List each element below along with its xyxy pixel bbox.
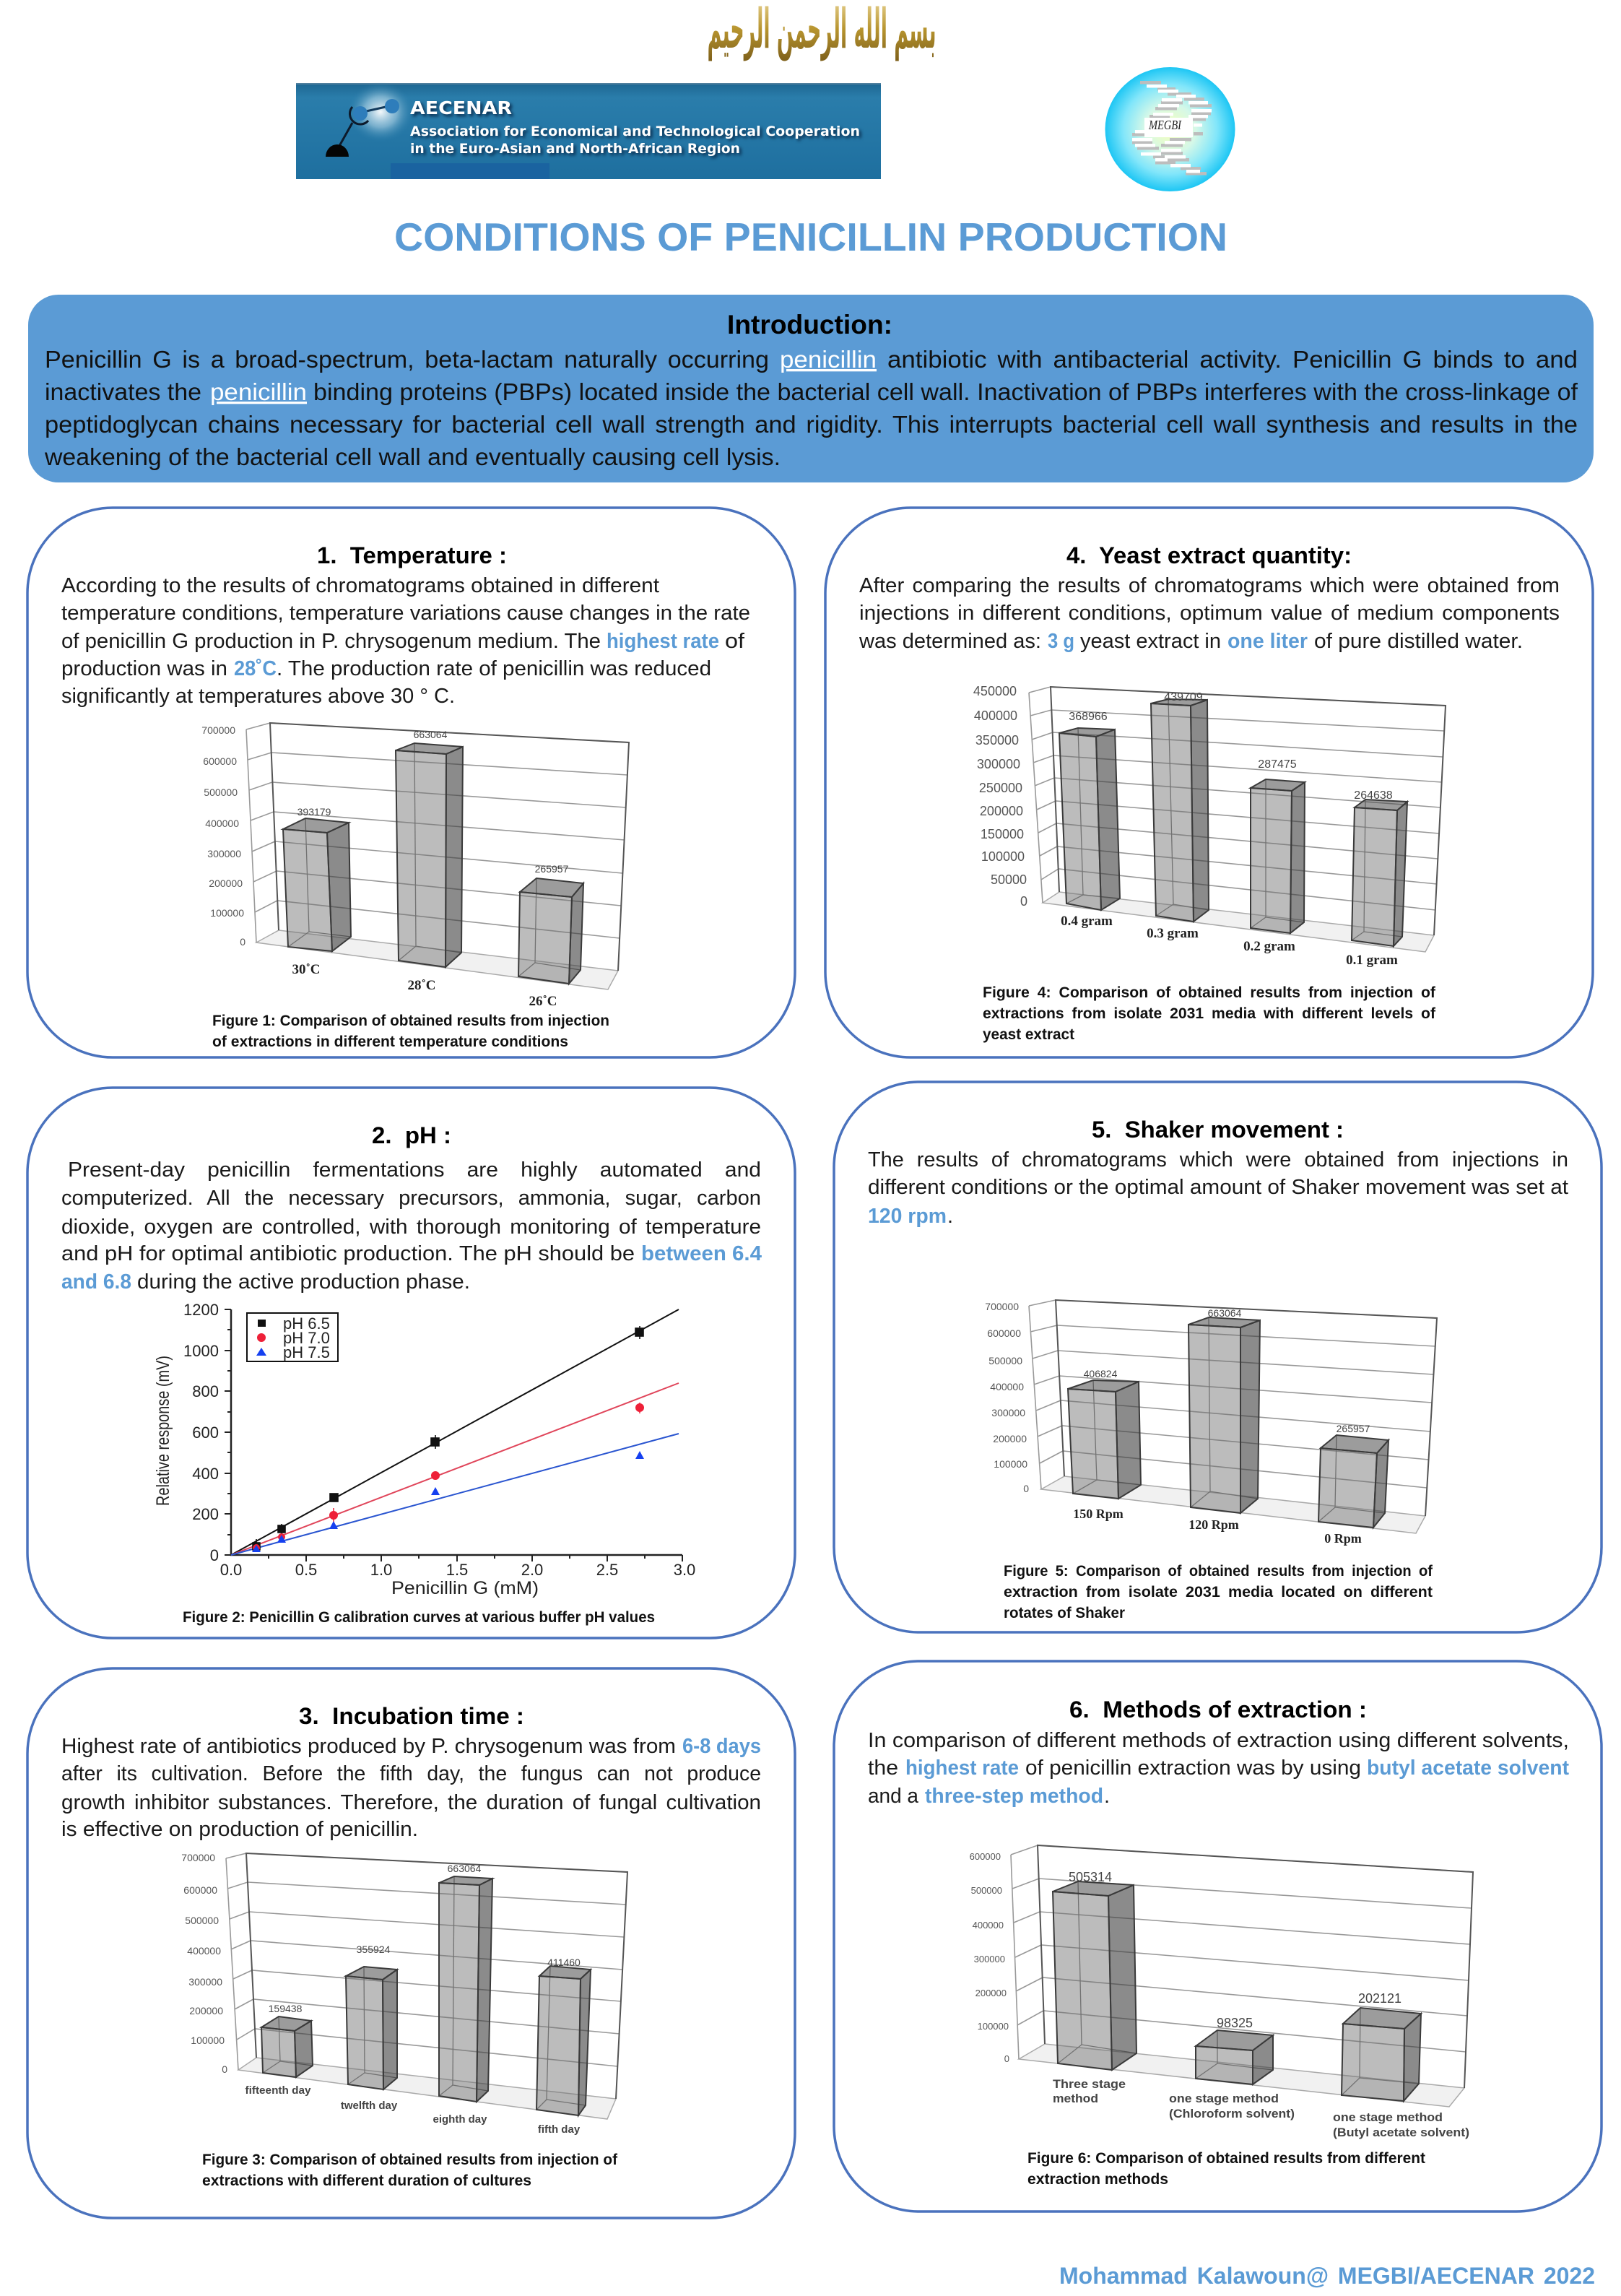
chart: figure 1 bar chart: [201, 723, 629, 1009]
chart: figure 1 bar chart: 700000: [201, 724, 235, 736]
chart: figure 4 bar chart: 250000: [979, 781, 1022, 795]
text block: pH body: [61, 1158, 762, 1294]
chart: figure 3 bar chart: 200000: [189, 2005, 223, 2016]
chart: figure 4 bar chart: 264638: [1354, 789, 1393, 802]
text block: incubation body: 6-8 days: [682, 1735, 761, 1758]
chart: figure 4 bar chart: 400000: [974, 709, 1017, 723]
text block: introduction body: binding proteins (PBPs) located inside the bacterial cell wall. Inactivation of PBPs interferes with the cross-linkage of: [313, 378, 1578, 405]
chart: figure 1 bar chart: 663064: [414, 729, 448, 740]
chart: figure 2 calibration curves: 0.0: [220, 1561, 242, 1579]
chart: figure 5 bar chart: [985, 1300, 1437, 1546]
text block: pH body: computerized. All the necessary precursors, ammonia, sugar, carbon: [61, 1187, 761, 1210]
chart: figure 1 bar chart: 265957: [535, 863, 569, 875]
chart: figure 3 bar chart: 100000: [191, 2035, 225, 2046]
caption: figure 5: [1004, 1563, 1433, 1621]
chart: figure 6 bar chart: [970, 1845, 1473, 2139]
heading: methods of extraction: 6. Methods of extraction :: [1069, 1697, 1367, 1723]
chart: figure 6 bar chart: 200000: [975, 1988, 1007, 1998]
chart: figure 3 bar chart: 411460: [547, 1957, 581, 1968]
text block: yeast body: of pure distilled water.: [1314, 630, 1523, 653]
chart: figure 4 bar chart: 0: [1020, 894, 1027, 909]
logo: AECENAR banner: AECENAR: [410, 98, 512, 118]
text block: shaker body: different conditions or the optimal amount of Shaker movement was set at: [868, 1176, 1568, 1199]
chart: figure 3 bar chart: 300000: [188, 1976, 222, 1988]
chart: figure 4 bar chart: 439709: [1164, 691, 1203, 703]
text block: incubation body: growth inhibitor substances. Therefore, the duration of fungal cultivation: [61, 1791, 761, 1814]
logo: MEGBI: [1105, 67, 1235, 191]
chart: figure 6 bar chart: Three stage: [1053, 2077, 1126, 2091]
legend: [247, 1313, 338, 1361]
chart: figure 1 bar chart: 300000: [207, 848, 241, 859]
chart: figure 6 bar chart: 100000: [978, 2021, 1009, 2032]
text block: yeast body: After comparing the results of chromatograms which were obtained from: [859, 574, 1560, 597]
text block: yeast body: yeast extract in: [1080, 630, 1221, 653]
text block: pH body: and pH for optimal antibiotic production. The pH should be: [61, 1242, 635, 1265]
chart: figure 1 bar chart: 500000: [204, 787, 238, 798]
title: CONDITIONS OF PENICILLIN PRODUCTION: [394, 215, 1227, 259]
caption: figure 1: Figure 1: Comparison of obtained results from injection: [212, 1013, 609, 1029]
heading: incubation time: 3. Incubation time :: [299, 1703, 524, 1729]
chart: figure 4 bar chart: 50000: [991, 872, 1027, 887]
chart: figure 6 bar chart: (Butyl acetate solvent): [1333, 2126, 1469, 2139]
text block: methods body: highest rate: [905, 1756, 1019, 1780]
caption: figure 4: Figure 4: Comparison of obtained results from injection of: [983, 984, 1436, 1001]
chart: figure 1 bar chart: 400000: [205, 818, 239, 829]
text block: yeast body: 3 g: [1048, 630, 1074, 653]
chart: figure 4 bar chart: 287475: [1258, 758, 1297, 771]
text block: methods body: the: [868, 1756, 898, 1780]
logo: AECENAR banner: [296, 82, 881, 179]
text block: introduction body: penicillin: [210, 378, 307, 405]
chart: figure 3 bar chart: 700000: [181, 1852, 215, 1863]
chart: figure 5 bar chart: 700000: [985, 1301, 1019, 1312]
text block: temperature body: highest rate: [607, 630, 719, 653]
chart: figure 1 bar chart: 600000: [203, 755, 237, 767]
caption: figure 1: of extractions in different temperature conditions: [212, 1034, 568, 1050]
chart: figure 3 bar chart: [181, 1852, 627, 2136]
text block: temperature body: of penicillin G production in P. chrysogenum medium. The: [61, 630, 601, 653]
chart: figure 2 calibration curves: 1000: [183, 1342, 219, 1360]
caption: figure 5: extraction from isolate 2031 media located on different: [1004, 1584, 1433, 1600]
text block: temperature body: of: [725, 630, 745, 653]
chart: figure 6 bar chart: one stage method: [1169, 2092, 1279, 2105]
chart: figure 4 bar chart: 300000: [977, 757, 1020, 771]
caption: figure 3: extractions with different duration of cultures: [202, 2172, 531, 2189]
chart: figure 6 bar chart: 600000: [970, 1851, 1001, 1862]
chart: figure 3 bar chart: 500000: [185, 1915, 219, 1926]
chart: figure 6 bar chart: 500000: [971, 1885, 1002, 1896]
text block: incubation body: [61, 1735, 761, 1841]
text block: introduction body: antibiotic with antibacterial activity. Penicillin G binds to and: [887, 346, 1578, 373]
chart: figure 2 calibration curves: 2.5: [596, 1561, 618, 1579]
chart: figure 5 bar chart: 100000: [994, 1458, 1027, 1470]
chart: figure 5 bar chart: 663064: [1208, 1307, 1242, 1319]
chart: figure 6 bar chart: 98325: [1217, 2016, 1253, 2030]
chart: figure 5 bar chart: 500000: [988, 1355, 1022, 1366]
chart: figure 2 calibration curves: 800: [192, 1382, 219, 1400]
chart: figure 5 bar chart: 265957: [1337, 1423, 1370, 1434]
text block: pH body: and 6.8: [61, 1270, 131, 1294]
text block: methods body: [868, 1729, 1569, 1808]
chart: figure 4 bar chart: 450000: [973, 684, 1017, 698]
chart: figure 1 bar chart: 393179: [297, 806, 331, 818]
caption: figure 6: Figure 6: Comparison of obtained results from different: [1027, 2150, 1425, 2167]
chart: figure 1 bar chart: 28˚C: [407, 978, 436, 993]
panel: 5 shaker movement: [834, 1082, 1602, 1632]
legend: pH 6.5: [283, 1314, 330, 1333]
caption: figure 5: rotates of Shaker: [1004, 1605, 1125, 1621]
heading: shaker movement: 5. Shaker movement :: [1092, 1117, 1344, 1143]
chart: figure 4 bar chart: 0.2 gram: [1243, 939, 1295, 954]
chart: figure 3 bar chart: 663064: [448, 1863, 482, 1874]
legend: pH 7.0: [283, 1329, 330, 1347]
chart: figure 4 bar chart: [973, 684, 1446, 968]
text block: methods body: of penicillin extraction was by using: [1025, 1756, 1361, 1780]
chart: figure 6 bar chart: (Chloroform solvent): [1169, 2107, 1295, 2120]
chart: figure 2 calibration curves: 2.0: [521, 1561, 543, 1579]
logo: AECENAR banner: in the Euro-Asian and North-African Region: [410, 141, 740, 157]
chart: figure 2 calibration curves: 0.5: [295, 1561, 317, 1579]
caption: figure 6: [1027, 2150, 1425, 2188]
chart: figure 6 bar chart: 400000: [973, 1920, 1004, 1931]
text block: incubation body: Highest rate of antibiotics produced by P. chrysogenum was from: [61, 1735, 676, 1758]
text block: introduction body: [44, 346, 1578, 470]
chart: figure 5 bar chart: 200000: [993, 1433, 1027, 1444]
chart: figure 5 bar chart: 600000: [987, 1327, 1021, 1339]
chart: figure 1 bar chart: 200000: [209, 878, 243, 889]
text block: shaker body: [868, 1148, 1568, 1228]
chart: figure 3 bar chart: 159438: [269, 2003, 303, 2014]
chart: figure 2 calibration curves: 200: [192, 1505, 219, 1523]
text block: introduction body: Penicillin G is a broad-spectrum, beta-lactam naturally occurring: [45, 346, 769, 373]
chart: figure 5 bar chart: 406824: [1084, 1368, 1118, 1379]
text block: incubation body: after its cultivation. Before the fifth day, the fungus can not produce: [61, 1762, 761, 1785]
chart: figure 2 calibration curves: 0: [210, 1546, 219, 1564]
text block: methods body: three-step method: [925, 1785, 1103, 1808]
chart: figure 5 bar chart: 150 Rpm: [1073, 1507, 1124, 1521]
chart: figure 2 calibration curves: Penicillin G (mM): [391, 1578, 539, 1598]
text block: introduction body: peptidoglycan chains necessary for bacterial cell wall strength and rigidity. This interrupts bacterial cell wall synthesis and results in the: [45, 411, 1578, 438]
chart: figure 4 bar chart: 150000: [981, 827, 1024, 841]
chart: figure 6 bar chart: 300000: [974, 1954, 1005, 1964]
text block: temperature body: temperature conditions, temperature variations cause changes in the rate: [61, 602, 750, 625]
chart: figure 4 bar chart: 0.4 gram: [1061, 914, 1113, 929]
text block: pH body: dioxide, oxygen are controlled, with thorough monitoring of temperature: [61, 1216, 761, 1239]
text block: temperature body: . The production rate of penicillin was reduced: [277, 657, 711, 680]
caption: figure 5: Figure 5: Comparison of obtained results from injection of: [1004, 1563, 1433, 1580]
caption: figure 2: Figure 2: Penicillin G calibration curves at various buffer pH values: [183, 1609, 655, 1626]
text block: shaker body: .: [947, 1205, 953, 1228]
chart: figure 1 bar chart: 26˚C: [529, 994, 557, 1009]
text block: introduction body: inactivates the: [45, 378, 201, 405]
legend: pH 7.5: [283, 1343, 330, 1361]
chart: figure 6 bar chart: 505314: [1069, 1870, 1112, 1884]
text block: methods body: and a: [868, 1785, 919, 1808]
chart: figure 3 bar chart: 600000: [183, 1884, 217, 1896]
chart: figure 1 bar chart: 0: [240, 936, 245, 948]
panel: 1 temperature: [27, 508, 795, 1057]
chart: figure 5 bar chart: 120 Rpm: [1188, 1517, 1239, 1532]
heading: pH: 2. pH :: [372, 1122, 451, 1148]
text block: yeast body: one liter: [1227, 630, 1308, 653]
text block: yeast body: was determined as:: [859, 630, 1041, 653]
chart: figure 3 bar chart: 400000: [187, 1945, 221, 1957]
panel: 2 pH: [27, 1088, 795, 1638]
chart: figure 5 bar chart: 300000: [991, 1407, 1025, 1418]
chart: figure 2 calibration curves: 1200: [183, 1301, 219, 1319]
chart: figure 3 bar chart: eighth day: [433, 2113, 487, 2126]
chart: figure 3 bar chart: fifth day: [538, 2123, 581, 2136]
chart: figure 5 bar chart: 400000: [990, 1381, 1024, 1392]
text block: incubation body: is effective on production of penicillin.: [61, 1818, 418, 1841]
chart: figure 6 bar chart: 202121: [1358, 1991, 1401, 2006]
text block: yeast body: [859, 574, 1560, 653]
footer: author credit: Mohammad Kalawoun@ MEGBI/AECENAR 2022: [1059, 2263, 1595, 2289]
chart: figure 2 calibration curves: 3.0: [674, 1561, 695, 1579]
chart: figure 2 calibration curves: 600: [192, 1424, 219, 1442]
text block: temperature body: According to the results of chromatograms obtained in different: [61, 574, 659, 597]
text block: shaker body: 120 rpm: [868, 1205, 947, 1228]
text block: pH body: during the active production phase.: [137, 1270, 470, 1294]
heading: yeast extract quantity: 4. Yeast extract quantity:: [1066, 542, 1352, 568]
chart: figure 2 calibration curves: [153, 1301, 695, 1598]
chart: figure 3 bar chart: fifteenth day: [245, 2084, 311, 2097]
logo: MEGBI: MEGBI: [1148, 118, 1182, 132]
chart: figure 4 bar chart: 0.3 gram: [1147, 926, 1199, 941]
caption: figure 4: yeast extract: [983, 1026, 1074, 1043]
chart: figure 2 calibration curves: 400: [192, 1465, 219, 1483]
text block: temperature body: [61, 574, 750, 708]
chart: figure 1 bar chart: 30˚C: [292, 962, 321, 977]
text block: methods body: .: [1104, 1785, 1110, 1808]
chart: figure 3 bar chart: 355924: [357, 1944, 391, 1955]
text block: introduction body: penicillin: [780, 346, 877, 373]
chart: figure 4 bar chart: 200000: [980, 804, 1023, 818]
caption: figure 4: extractions from isolate 2031 media with different levels of: [983, 1005, 1436, 1022]
text block: methods body: In comparison of different methods of extraction using different solvents,: [868, 1729, 1569, 1752]
chart: figure 3 bar chart: twelfth day: [341, 2100, 398, 2112]
chart: figure 3 bar chart: 0: [222, 2063, 227, 2075]
chart: figure 2 calibration curves: 1.0: [370, 1561, 392, 1579]
text block: pH body: Present-day penicillin fermentations are highly automated and: [68, 1158, 761, 1182]
chart: figure 6 bar chart: 0: [1004, 2053, 1009, 2064]
text block: introduction body: weakening of the bacterial cell wall and eventually causing cell lysis.: [44, 443, 781, 470]
chart: figure 6 bar chart: method: [1053, 2092, 1098, 2105]
text block: shaker body: The results of chromatograms which were obtained from injections in: [868, 1148, 1568, 1171]
logo: AECENAR banner: Association for Economical and Technological Cooperation: [410, 124, 860, 139]
panel: 4 yeast extract quantity: [825, 508, 1593, 1057]
panel: 3 incubation time: [27, 1668, 795, 2218]
chart: figure 1 bar chart: 100000: [210, 907, 244, 919]
text block: temperature body: significantly at temperatures above 30 ° C.: [61, 685, 455, 708]
panel: 6 methods of extraction: [834, 1661, 1602, 2211]
text block: temperature body: production was in: [61, 657, 227, 680]
chart: figure 6 bar chart: one stage method: [1333, 2110, 1443, 2124]
heading: temperature: 1. Temperature :: [317, 542, 507, 568]
text block: yeast body: injections in different conditions, optimum value of medium components: [859, 602, 1560, 625]
chart: figure 5 bar chart: 0 Rpm: [1324, 1531, 1362, 1546]
caption: figure 6: extraction methods: [1027, 2171, 1168, 2188]
chart: figure 4 bar chart: 350000: [975, 733, 1019, 748]
text block: temperature body: 28˚C: [234, 657, 277, 680]
chart: figure 2 calibration curves: 1.5: [446, 1561, 468, 1579]
text block: methods body: butyl acetate solvent: [1367, 1756, 1569, 1780]
chart: figure 4 bar chart: 0.1 gram: [1346, 953, 1398, 968]
caption: figure 1: [212, 1013, 609, 1050]
heading: Introduction: Introduction:: [727, 310, 892, 339]
chart: figure 2 calibration curves: Relative response (mV): [153, 1356, 173, 1506]
chart: figure 4 bar chart: 100000: [981, 849, 1025, 864]
chart: figure 4 bar chart: 368966: [1069, 711, 1108, 723]
chart: figure 5 bar chart: 0: [1023, 1483, 1029, 1494]
caption: figure 3: Figure 3: Comparison of obtained results from injection of: [202, 2152, 618, 2168]
caption: figure 3: [202, 2152, 618, 2189]
text block: pH body: between 6.4: [641, 1242, 762, 1265]
caption: figure 4: [983, 984, 1436, 1043]
panel: introduction: [28, 295, 1594, 482]
